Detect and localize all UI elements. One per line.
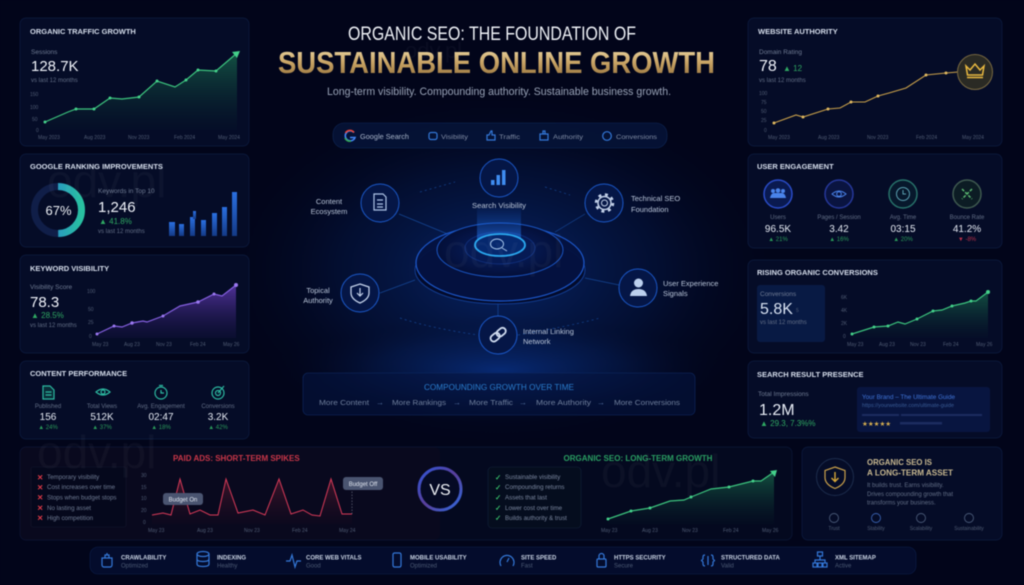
node: content ecosystem [311,184,399,222]
panel: user engagement: Users [770,215,786,221]
panel: keyword visibility [20,255,249,353]
icon: versus badge: VS [429,482,451,499]
panel: compounding growth over time: More Rankings [392,398,446,407]
node: user experience signals: User Experience [663,279,718,288]
panel: search result presence: Total Impressions [758,391,809,398]
panel: content performance: ▲ 37% [92,425,112,431]
list: paid ads drawbacks: ✕ [37,483,43,492]
panel: content performance: Conversions [201,404,235,410]
icon: views [96,389,110,395]
area chart: visibility score: May 26 [223,342,240,348]
list: paid ads drawbacks: Temporary visibility [47,474,100,481]
panel: user engagement: ▲ 20% [893,237,913,243]
line chart: paid ads spikes: 20 [141,508,147,514]
panel: rising organic conversions: 5 [796,308,799,314]
navigation pill: Traffic [499,134,521,141]
panel: compounding growth over time: → [519,398,527,407]
icon: average time [889,180,917,208]
panel: user engagement: Bounce Rate [950,215,985,221]
list: organic seo benefits: ✓ [495,473,501,482]
panel: long-term asset: transforms your business. [867,500,936,506]
item: mobile usability: Optimized [410,564,437,570]
panel: compounding growth over time: → [376,398,384,407]
list: organic seo benefits: ✓ [495,504,501,512]
item: indexing: Healthy [217,564,237,570]
panel: google ranking improvements: 1,246 [98,199,136,216]
line chart: paid ads spikes: Nov 23 [244,528,260,534]
node: topical authority: Authority [303,296,333,305]
list: organic seo benefits [488,467,581,528]
panel: google ranking improvements: GOOGLE RANKING IMPROVEMENTS [30,162,163,171]
area chart: organic growth: Nov 23 [682,528,698,534]
panel: long-term asset: A LONG-TERM ASSET [867,468,954,478]
icon: bounce rate [953,180,981,208]
line chart: paid ads spikes: May 23 [148,528,165,534]
line chart: domain rating: 25 [761,118,767,124]
line chart: paid ads spikes: Feb 24 [292,528,308,534]
line chart: sessions: 50 [32,117,38,123]
watermarks: odv.pl [444,225,563,277]
panel: user engagement: 03:15 [890,224,916,235]
item: https security [597,554,666,570]
item: mobile usability: MOBILE USABILITY [410,556,467,562]
item: core web vitals: Good [306,564,321,570]
panel: search result presence: 1.2M [759,402,795,419]
panel: long-term asset: Scalability [910,526,933,532]
central hub diagram [380,182,619,335]
area chart: visibility score: 50 [88,307,94,313]
node: internal linking network: Internal Linking [523,327,574,336]
item: xml sitemap: Active [835,564,852,570]
list: organic seo benefits: ✓ [495,483,501,492]
panel: organic traffic growth: ORGANIC TRAFFIC GROWTH [30,27,136,36]
item: mobile usability [393,553,467,570]
line chart: domain rating: 50 [761,109,767,115]
list: paid ads drawbacks: ✕ [37,473,43,482]
panel: long-term asset [802,447,1002,540]
area chart: visibility score: May 23 [92,342,109,348]
line chart: paid ads spikes: May 24 [339,528,356,534]
watermarks: odv.pl [47,155,166,207]
line chart: paid ads spikes: 30 [141,473,147,479]
search result card: https://yourwebsite.com/ultimate-guide [862,403,954,409]
panel: long-term asset: ORGANIC SEO IS [867,457,932,467]
node: content ecosystem: Content [316,197,343,206]
node: search visibility [472,159,526,210]
list: paid ads drawbacks: High competition [47,515,94,522]
list: organic seo benefits: ✓ [495,514,501,522]
line chart: domain rating: 0 [764,128,767,134]
panel: website authority [748,18,1002,146]
panel: rising organic conversions: vs last 12 months [760,320,807,326]
panel: rising organic conversions: RISING ORGANIC CONVERSIONS [757,268,878,277]
panel: compounding growth over time: → [453,398,461,407]
area chart: conversions: 4K [841,308,848,314]
area chart: conversions: Feb 24 [943,342,959,348]
list: organic seo benefits: Sustainable visibility [505,474,561,481]
title: ORGANIC SEO: THE FOUNDATION OF [348,24,636,45]
node: internal linking network [479,316,574,354]
area chart: organic growth [601,470,779,534]
panel: search result presence: ▲ 29.3, 7.3%% [760,419,816,428]
line chart: paid ads spikes: Aug 23 [197,528,213,534]
panel: long-term asset: Sustainability [954,526,984,532]
panel: user engagement: Pages / Session [817,215,861,221]
node: content ecosystem: Ecosystem [311,207,347,216]
panel: user engagement [748,154,1002,248]
area chart: organic growth: Aug 23 [642,528,658,534]
list: paid ads drawbacks: Stops when budget stops [47,494,116,502]
area chart: visibility score: 100 [87,289,96,295]
panel: user engagement: USER ENGAGEMENT [757,162,834,171]
list: paid ads drawbacks: ✕ [37,514,43,522]
panel: user engagement: Avg. Time [890,215,917,221]
panel: search result presence: SEARCH RESULT PRESENCE [757,370,864,379]
watermarks: odv.pl [405,38,462,63]
panel: compounding growth over time: → [597,398,605,407]
item: core web vitals: CORE WEB VITALS [306,556,362,562]
item: crawlability [102,553,166,570]
line chart: sessions: Feb 2024 [174,135,195,141]
icon: users [764,180,792,208]
panel: long-term asset: Stability [867,526,885,532]
line chart: paid ads spikes: 15 [141,485,147,491]
line chart: domain rating: Aug 2023 [818,135,840,141]
panel: keyword visibility: 78.3 [30,294,59,311]
node: technical seo foundation: Technical SEO [631,194,680,203]
area chart: conversions: 2K [841,321,848,327]
node: user experience signals: Signals [663,289,688,298]
line chart: domain rating: 75 [761,100,767,106]
panel: google ranking improvements: vs last 12 months [98,229,145,235]
bar chart: rankings [169,192,237,236]
donut chart: 67%: 67% [45,203,72,218]
line chart: domain rating: Feb 2024 [916,135,937,141]
panel: google ranking improvements [20,154,249,247]
panel: long-term asset: Trust [828,526,840,532]
area chart: conversions: Aug 23 [879,342,895,348]
item: crawlability: Optimized [121,564,148,570]
area chart: conversions: 0 [843,334,846,340]
area chart: visibility score: 0 [89,334,92,340]
panel: paid vs organic comparison [20,447,792,540]
icon: pages per session [825,180,853,208]
panel: compounding growth over time: More Authority [536,398,591,407]
panel: organic traffic growth: 128.7K [31,58,79,75]
line chart: paid ads spikes: 10 [141,496,147,502]
item: indexing: INDEXING [217,556,246,562]
panel: compounding growth over time: More Traffic [469,398,513,407]
list: organic seo benefits: Lower cost over time [505,505,563,512]
item: indexing [197,552,246,570]
panel: google ranking improvements: ▲ 41.8% [99,217,132,226]
item: structured data: Valid [721,564,734,570]
panel: content performance: Avg. Engagement [137,404,185,410]
line chart: domain rating [759,72,984,141]
subtitle: Long-term visibility. Compounding authority. Sustainable business growth. [327,86,671,98]
panel: compounding growth over time: More Conversions [614,398,680,407]
search result card [857,387,990,432]
area chart: organic growth: May 26 [762,528,779,534]
panel: content performance: 156 [40,412,57,423]
icon: google [345,130,355,141]
panel: keyword visibility: KEYWORD VISIBILITY [30,264,109,273]
line chart: sessions: Nov 2023 [128,135,150,141]
line chart: domain rating: May 2024 [962,135,984,141]
icon: conversions [212,386,224,399]
area chart: visibility score: Aug 23 [124,342,140,348]
icon: engagement [155,386,167,399]
donut chart: 67% [34,186,82,234]
callout: budget off: Budget Off [349,482,378,488]
panel: content performance: ▲ 42% [208,425,228,431]
item: site speed: Fast [521,564,533,570]
watermarks: odv.pl [37,426,156,478]
area chart: organic growth: May 23 [601,528,618,534]
list: organic seo benefits: Compounding returns [505,484,565,491]
area chart: visibility score: Feb 24 [190,342,206,348]
panel: compounding growth over time [303,373,695,415]
item: site speed: SITE SPEED [521,556,557,562]
area chart: conversions: May 23 [847,342,864,348]
heading: organic seo: ORGANIC SEO: LONG-TERM GROWTH [564,454,713,463]
panel: keyword visibility: Visibility Score [30,284,73,291]
navigation pill: Visibility [441,134,469,141]
panel: user engagement: 41.2% [953,224,981,235]
navigation pill: Google Search [360,132,409,141]
list: organic seo benefits: ✓ [495,493,501,502]
search result card: Your Brand – The Ultimate Guide [862,394,955,401]
bottom technical seo bar [90,547,916,574]
panel: rising organic conversions [748,260,1002,353]
panel: rising organic conversions: 5.8K [760,301,793,318]
panel: content performance: 3.2K [208,412,229,423]
navigation pill: Conversions [616,134,658,141]
panel: content performance: 02:47 [148,412,174,423]
line chart: domain rating: May 2023 [768,135,790,141]
panel: content performance [20,361,249,439]
panel: website authority: WEBSITE AUTHORITY [758,27,838,36]
list: paid ads drawbacks: No lasting asset [47,505,91,512]
panel: content performance: CONTENT PERFORMANCE [30,369,127,378]
panel: keyword visibility: ▲ 28.5% [31,311,64,320]
list: organic seo benefits: Builds authority & trust [505,515,567,522]
watermarks [37,38,720,497]
panel: long-term asset: It builds trust. Earns visibility. [867,483,944,489]
node: topical authority [303,274,379,312]
panel: content performance: ▲ 24% [38,425,58,431]
panel: long-term asset: Drives compounding growth that [867,492,953,498]
node: internal linking network: Network [523,337,551,346]
area chart: conversions: May 26 [976,342,993,348]
title: SUSTAINABLE ONLINE GROWTH [278,45,715,80]
panel: user engagement: ▲ 16% [829,237,849,243]
panel: keyword visibility: vs last 12 months [30,323,77,329]
panel: website authority: 78 [759,58,777,75]
node: technical seo foundation [585,184,680,222]
line chart: domain rating: 100 [759,91,768,97]
item: core web vitals [286,555,362,570]
node: technical seo foundation: Foundation [631,205,669,214]
item: https security: HTTPS SECURITY [614,556,666,562]
icon: gold shield [816,458,854,496]
panel: content performance: ▲ 18% [151,425,171,431]
line chart: sessions: May 2024 [218,135,240,141]
icon: versus badge [419,468,461,510]
list: paid ads drawbacks: Cost increases over time [47,484,116,491]
item: structured data: STRUCTURED DATA [721,556,780,562]
callout: budget on [163,493,203,505]
item: xml sitemap: XML SITEMAP [835,556,876,562]
panel: organic traffic growth: vs last 12 months [31,78,78,84]
area chart: visibility score [87,283,240,348]
line chart: domain rating: Nov 2023 [867,135,889,141]
area chart: visibility score: Nov 23 [156,342,172,348]
line chart: sessions: Aug 2023 [84,135,106,141]
area chart: conversions: 6K [841,295,848,301]
line chart: sessions: May 2023 [38,135,60,141]
panel: compounding growth over time: COMPOUNDING GROWTH OVER TIME [424,382,574,392]
line chart: sessions [30,51,240,141]
panel: content performance: Published [35,404,61,410]
navigation pill [333,123,667,148]
item: structured data [702,555,780,570]
benefit icons [830,514,974,522]
node: user experience signals [619,269,718,307]
panel: compounding growth over time: More Content [319,398,370,407]
search platform [415,208,585,304]
panel: search result presence [748,361,1002,438]
panel: user engagement: 96.5K [765,224,791,235]
panel: website authority: vs last 12 months [759,78,806,84]
search result card: ★★★★★ [862,420,891,428]
area chart: conversions: Nov 23 [910,342,926,348]
area chart: visibility score: 25 [88,320,94,326]
line chart: sessions: 0 [36,128,39,134]
title [278,24,715,80]
node: search visibility: Search Visibility [472,201,526,210]
panel: website authority: ▲ 12 [783,64,803,73]
node: topical authority: Topical [306,286,330,295]
panel: website authority: Domain Rating [759,49,802,56]
item: xml sitemap [813,552,876,570]
panel: organic traffic growth [20,18,249,146]
area chart: conversions [841,290,993,348]
watermarks: odv.pl [601,445,720,497]
line chart: sessions: 100 [30,105,39,111]
panel: rising organic conversions: Conversions [760,291,797,298]
panel: content performance: Total Views [87,404,117,410]
panel: user engagement: 3.42 [829,224,849,235]
line chart: paid ads spikes: 0 [143,520,146,526]
panel: user engagement: ▲ 21% [768,237,788,243]
connectors [380,182,619,335]
item: https security: Secure [614,564,634,570]
callout: budget on: Budget On [169,498,197,504]
area chart: organic growth: Feb 24 [723,528,739,534]
line chart: sessions: 150 [30,92,39,98]
heading: paid ads: PAID ADS: SHORT-TERM SPIKES [173,454,300,463]
list: paid ads drawbacks: ✕ [37,504,43,512]
line chart: paid ads spikes [141,473,356,534]
list: paid ads drawbacks: ✕ [37,493,43,502]
list: paid ads drawbacks [31,467,126,527]
navigation pill: Authority [553,134,584,141]
panel: content performance: 512K [90,412,114,423]
panel: organic traffic growth: Sessions [31,49,58,56]
item: site speed [500,555,557,570]
panel: user engagement: ▼ -8% [958,237,977,243]
icon: published [43,386,54,399]
panel: google ranking improvements: Keywords in Top 10 [98,188,155,195]
callout: budget off [343,477,383,490]
item: crawlability: CRAWLABILITY [121,556,166,562]
list: organic seo benefits: Assets that last [505,494,547,502]
icon: crown [958,54,992,90]
